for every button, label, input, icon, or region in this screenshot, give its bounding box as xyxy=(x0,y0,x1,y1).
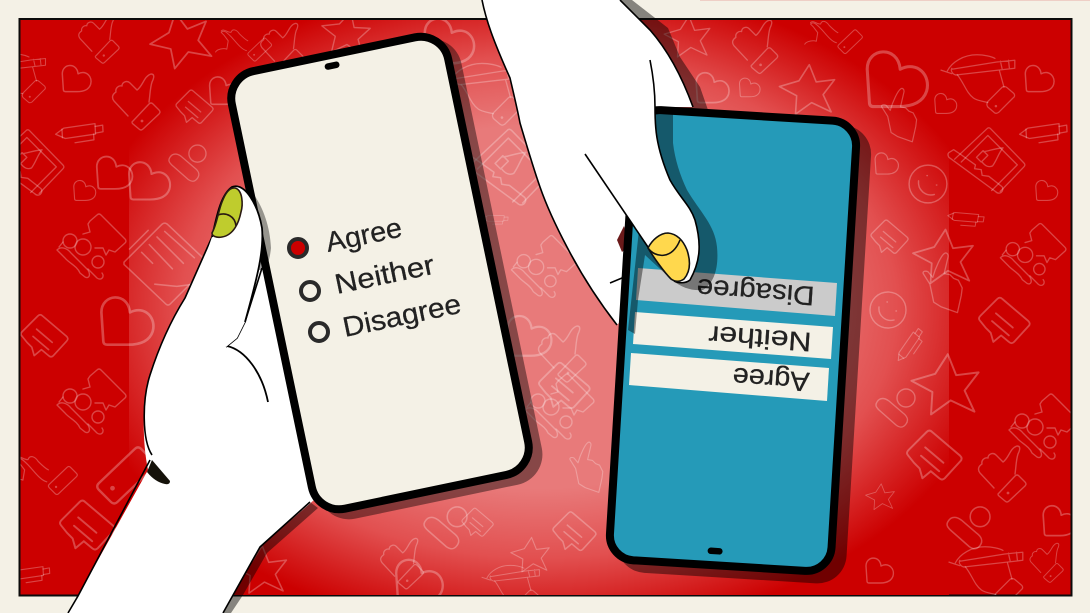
option bar: Neither: Neither xyxy=(708,320,812,357)
label: Neither: Neither xyxy=(332,249,437,300)
icon: dark cuff sliver xyxy=(147,460,170,484)
left hand palm xyxy=(68,230,314,613)
panel: left phone xyxy=(226,32,534,514)
icon: yellow fingernail xyxy=(648,233,689,281)
top thumb outlines xyxy=(585,60,699,283)
left thumb xyxy=(190,186,262,347)
option bar: Agree: Agree xyxy=(732,362,810,397)
radio option: Agree selected xyxy=(289,239,307,257)
top hand shadow xyxy=(620,0,708,110)
left hand shadow xyxy=(223,502,318,613)
radio option: Neither xyxy=(301,282,319,300)
panel: left phone shadow xyxy=(232,33,548,525)
icon: olive fingernail xyxy=(212,188,242,237)
top edge tint xyxy=(700,0,1090,1)
panel: right phone xyxy=(608,109,858,572)
top thumb xyxy=(585,60,699,282)
option bar: Agree xyxy=(629,353,829,401)
left finger shadow xyxy=(252,192,271,270)
small dark shadow beside phone edge xyxy=(617,226,630,252)
label: Agree: Agree xyxy=(323,212,405,258)
top hand outline xyxy=(482,0,693,325)
label: Disagree: Disagree xyxy=(340,288,464,343)
left hand outlines xyxy=(68,237,310,613)
top thumb shadow on screen xyxy=(628,112,717,334)
radio option: Disagree xyxy=(310,323,328,341)
option bar: Neither xyxy=(633,312,833,359)
option bar: Disagree pressed xyxy=(636,268,837,316)
option bar: Disagree pressed: Disagree xyxy=(696,273,815,311)
top hand xyxy=(482,0,693,325)
left thumb outline xyxy=(212,186,262,322)
crease on top hand xyxy=(610,270,626,283)
panel: right phone shadow xyxy=(615,113,873,585)
